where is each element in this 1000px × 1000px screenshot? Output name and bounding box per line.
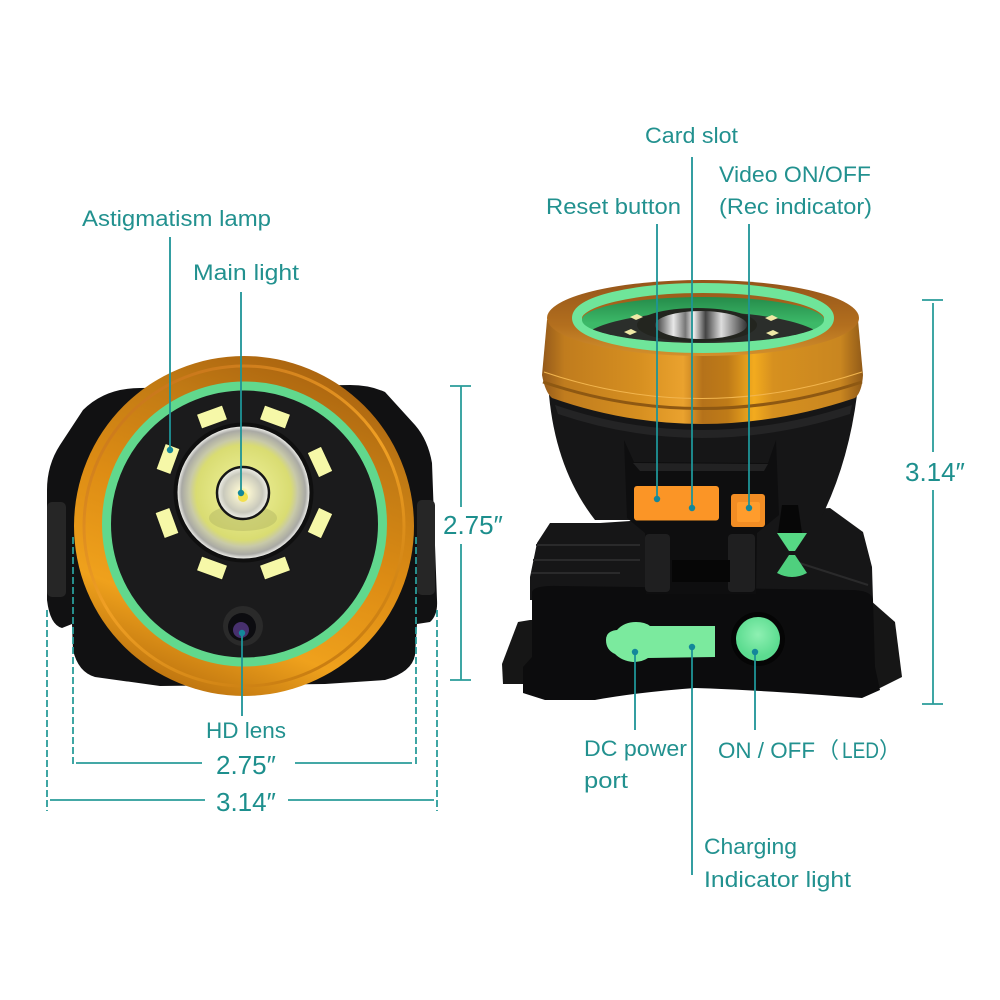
label: DC power port: DC power	[584, 736, 687, 761]
mount straps	[502, 620, 545, 684]
label: DC power port	[584, 649, 687, 793]
top opening	[582, 297, 824, 343]
label: card slot	[645, 123, 738, 511]
green ring	[106, 386, 382, 662]
label: video on off: (Rec indicator)	[719, 194, 872, 219]
dimension: front outer width	[47, 610, 437, 817]
label: main light: Main light	[193, 260, 299, 285]
hinge arms	[645, 534, 755, 592]
green pin	[777, 505, 807, 577]
label: ON OFF LED	[718, 649, 901, 763]
front housing	[47, 385, 437, 686]
gold lower band	[542, 320, 863, 424]
label: main light	[193, 260, 299, 496]
astigmatism lamps	[155, 405, 333, 580]
label: reset button	[546, 194, 681, 502]
reset and card slot	[634, 486, 719, 520]
dimension: front inner width: 2.75″	[216, 750, 276, 780]
label: ON OFF LED: LED	[842, 738, 879, 763]
label: video on off: Video ON/OFF	[719, 162, 871, 187]
body dome	[549, 395, 857, 520]
dc port cover	[606, 622, 715, 662]
dimension: side height: 3.14″	[905, 457, 965, 487]
dimension: front outer width: 3.14″	[216, 787, 276, 817]
label: charging indicator light: Charging	[704, 834, 797, 859]
headlamp front view	[47, 356, 437, 696]
top lens	[637, 308, 757, 342]
label: charging indicator light: Indicator light	[704, 867, 851, 892]
mount front block	[523, 586, 880, 700]
label: ON OFF LED: （	[817, 738, 839, 763]
main light	[174, 422, 314, 562]
label: video on off	[719, 162, 872, 511]
label: astigmatism lamp	[82, 206, 271, 453]
green ring	[577, 288, 829, 348]
label: HD lens	[206, 630, 286, 743]
gold top rim	[547, 280, 859, 356]
label: reset button: Reset button	[546, 194, 681, 219]
label: charging indicator light	[689, 644, 851, 892]
dimension: front height	[443, 386, 503, 680]
gold bezel	[74, 356, 414, 696]
label: DC power port: port	[584, 768, 628, 793]
HD lens	[223, 606, 263, 646]
label: ON OFF LED: ）	[879, 738, 901, 763]
hinge plate	[624, 440, 779, 594]
mount top block	[530, 508, 873, 600]
label: astigmatism lamp: Astigmatism lamp	[82, 206, 271, 231]
label: HD lens: HD lens	[206, 718, 286, 743]
dimension: front height: 2.75″	[443, 510, 503, 540]
video button	[731, 494, 765, 527]
housing straps	[47, 500, 435, 597]
dimension: side height	[905, 300, 965, 704]
dimension: front inner width	[73, 537, 416, 780]
on off button	[731, 612, 785, 666]
label: card slot: Card slot	[645, 123, 738, 148]
small LEDs	[624, 314, 779, 336]
headlamp side view	[502, 280, 902, 700]
label: ON OFF LED: ON / OFF	[718, 738, 815, 763]
